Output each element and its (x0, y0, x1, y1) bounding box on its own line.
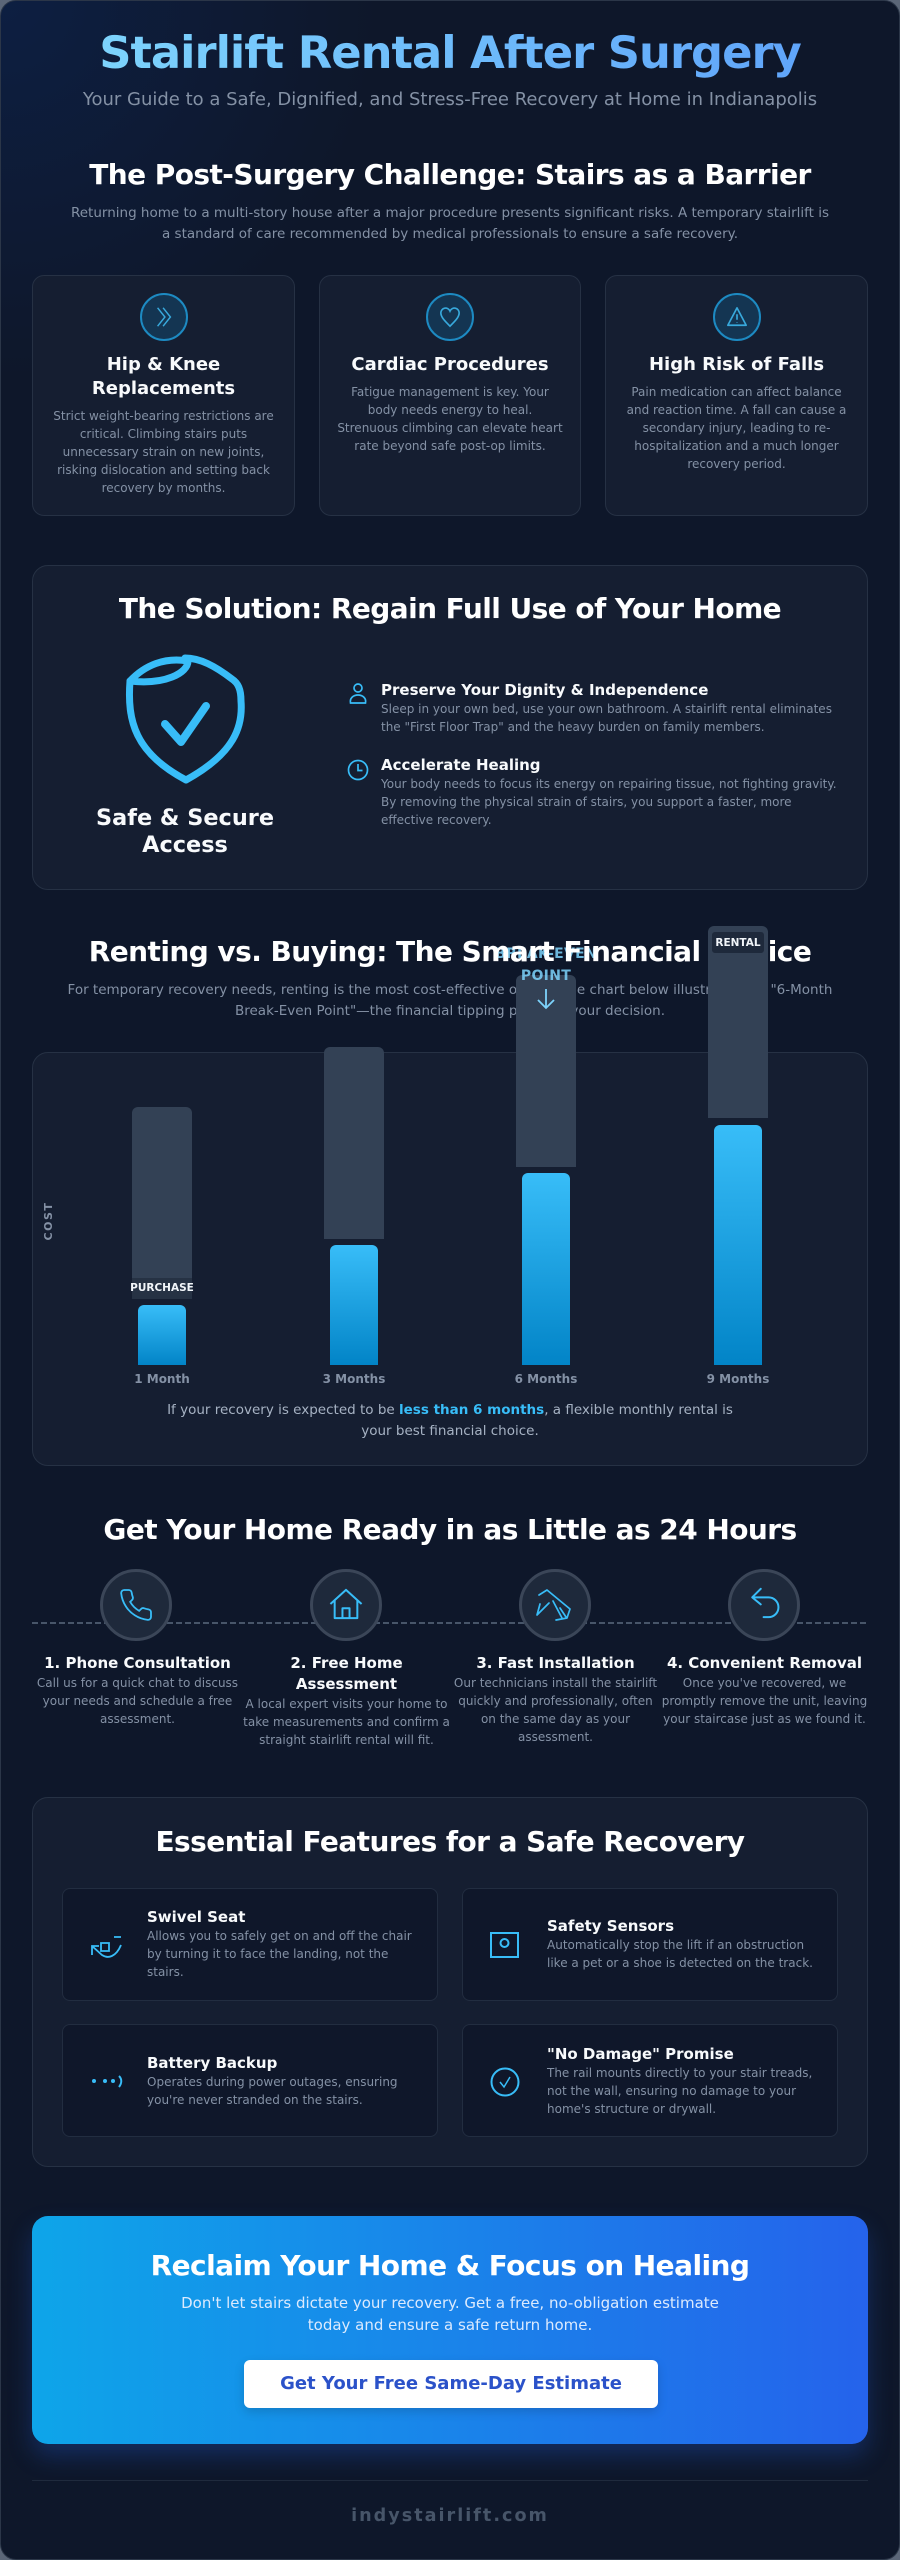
label: purchase: PURCHASE (130, 1282, 194, 1294)
panel: call to action (32, 2216, 868, 2444)
benefit text: the "First Floor Trap" and the heavy burden on family members. (381, 720, 765, 734)
step 1 text: Call us for a quick chat to discuss (37, 1676, 238, 1690)
text: 3 Months (323, 1372, 385, 1386)
step 3 text: quickly and professionally, often (458, 1694, 653, 1708)
step 1 text: your needs and schedule a free (43, 1694, 232, 1708)
bar: 3 months purchase (324, 1047, 384, 1239)
title: Stairlift Rental After Surgery (99, 26, 801, 79)
card text: rate beyond safe post-op limits. (354, 439, 546, 453)
bar: 9 months rental (714, 1125, 762, 1365)
intro text: renting vs buying (68, 982, 832, 1019)
icon: down arrow (537, 989, 555, 1010)
heading: renting vs buying: Renting vs. Buying: The Smart Financial Choice (89, 935, 811, 968)
step 4 text: your staircase just as we found it. (663, 1712, 866, 1726)
challenge intro text: a standard of care recommended by medical professionals to ensure a safe recovery. (162, 226, 738, 242)
heading: solution: The Solution: Regain Full Use of Your Home (119, 592, 781, 625)
step 2 title: 2. Free Home (290, 1654, 403, 1672)
chart takeaway: your best financial choice. (361, 1423, 539, 1439)
step 2 text (243, 1697, 450, 1747)
feature text (547, 1938, 813, 1970)
card text (627, 385, 846, 471)
cta heading: Reclaim Your Home & Focus on Healing (151, 2249, 749, 2282)
feature text (546, 2066, 812, 2116)
cta button (244, 2360, 658, 2408)
text: 6 Months (515, 1372, 577, 1386)
card text (337, 385, 563, 453)
card text: recovery period. (687, 457, 786, 471)
icon: chevrons (140, 293, 188, 341)
card text (53, 409, 274, 495)
feature text: like a pet or a shoe is detected on the track. (547, 1956, 813, 1970)
heading: challenge: The Post-Surgery Challenge: Stairs as a Barrier (89, 158, 811, 191)
feature: safety sensors (462, 1888, 838, 2001)
feature title: Battery Backup (147, 2054, 277, 2072)
label: break-even point: POINT (521, 968, 571, 984)
benefit heading: Preserve Your Dignity & Independence (381, 681, 708, 699)
benefit text (381, 702, 832, 734)
month labels: 1 Month (134, 1372, 190, 1386)
step 4 title: 4. Convenient Removal (667, 1654, 862, 1672)
card heading (92, 354, 235, 399)
card text: Pain medication can affect balance (631, 385, 842, 399)
icon: heart (426, 293, 474, 341)
shield caption (96, 805, 274, 858)
step 3 text: Our technicians install the stairlift (454, 1676, 657, 1690)
step 3 title: 3. Fast Installation (476, 1654, 635, 1672)
icon: person (350, 683, 366, 704)
bar: 1 month purchase (132, 1107, 192, 1299)
challenge intro text (71, 205, 829, 242)
shield caption: Safe & Secure (96, 805, 274, 831)
benefit text: Your body needs to focus its energy on repairing tissue, not fighting gravity. (381, 777, 837, 791)
benefit text: By removing the physical strain of stairs, you support a faster, more (381, 795, 792, 809)
label: break-even point (495, 946, 597, 984)
card text: Strict weight-bearing restrictions are (53, 409, 274, 423)
card heading: Cardiac Procedures (351, 354, 549, 375)
cta button: Get Your Free Same-Day Estimate (280, 2373, 622, 2394)
icon: sensor (490, 1932, 519, 1958)
step 1 title: 1. Phone Consultation (44, 1654, 231, 1672)
feature text: not the wall, ensuring no damage to your (547, 2084, 796, 2098)
feature text: stairs. (147, 1965, 184, 1979)
cta text: today and ensure a safe return home. (308, 2316, 592, 2334)
feature text: home's structure or drywall. (547, 2102, 716, 2116)
icon: warning (713, 293, 761, 341)
step 2 text: A local expert visits your home to (246, 1697, 448, 1711)
feature text (147, 2075, 398, 2107)
feature: no damage promise (462, 2024, 838, 2137)
footer: indystairlift.com (351, 2506, 549, 2526)
bar: 1 month rental (138, 1305, 186, 1365)
bar: 3 months rental (330, 1245, 378, 1365)
chart takeaway: If your recovery is expected to be less than 6 months, a flexible monthly rental is (167, 1402, 733, 1418)
panel: cost chart (32, 1052, 868, 1466)
feature title: Safety Sensors (547, 1917, 674, 1935)
step 1 text (37, 1676, 238, 1726)
challenge intro text: Returning home to a multi-story house after a major procedure presents significant risks. A temporary stairlift is (71, 205, 829, 221)
card text: secondary injury, leading to re- (643, 421, 830, 435)
heading: process: Get Your Home Ready in as Little as 24 Hours (103, 1513, 797, 1546)
step 1 text: assessment. (100, 1712, 175, 1726)
cta text (181, 2294, 719, 2334)
card text: risking dislocation and setting back (57, 463, 270, 477)
panel: falls (605, 275, 868, 516)
panel: hip and knee (32, 275, 295, 516)
panel: cardiac (319, 275, 581, 516)
panel: features (32, 1797, 868, 2167)
bar: 6 months purchase (516, 975, 576, 1167)
panel: solution (32, 565, 868, 890)
step 4 text: Once you've recovered, we (683, 1676, 846, 1690)
intro text: renting vs buying: Break-Even Point"—the financial tipping point for your decision. (235, 1003, 665, 1019)
shield caption: Access (142, 832, 228, 858)
card heading: Replacements (92, 378, 235, 399)
timeline line (32, 1622, 868, 1624)
card text: recovery by months. (102, 481, 225, 495)
step 2 icon: home (310, 1569, 382, 1641)
feature title: "No Damage" Promise (547, 2045, 734, 2063)
card text: and reaction time. A fall can cause a (627, 403, 846, 417)
bar: 6 months rental (522, 1173, 570, 1365)
axis label: COST (42, 1202, 55, 1240)
benefit text (381, 777, 837, 827)
label: rental: RENTAL (715, 937, 761, 949)
chart takeaway (167, 1402, 733, 1439)
bar: 9 months purchase (708, 926, 768, 1118)
benefit text: Sleep in your own bed, use your own bathroom. A stairlift rental eliminates (381, 702, 832, 716)
step 4 text: promptly remove the unit, leaving (662, 1694, 867, 1708)
icon: shield (126, 654, 245, 784)
step 4 text (662, 1676, 867, 1726)
icon: check circle (490, 2068, 520, 2096)
card text: body needs energy to heal. (368, 403, 532, 417)
step 1 icon: phone (100, 1569, 172, 1641)
heading: features: Essential Features for a Safe Recovery (155, 1825, 745, 1858)
card heading: Hip & Knee (107, 354, 220, 375)
card text: critical. Climbing stairs puts (80, 427, 247, 441)
step 4 icon: return (728, 1569, 800, 1641)
text: 9 Months (707, 1372, 769, 1386)
card text: hospitalization and a much longer (634, 439, 839, 453)
benefit heading: Accelerate Healing (381, 756, 541, 774)
feature: swivel seat (62, 1888, 438, 2001)
feature text: by turning it to face the landing, not the (147, 1947, 388, 1961)
card text: Fatigue management is key. Your (351, 385, 549, 399)
card text: Strenuous climbing can elevate heart (337, 421, 563, 435)
feature text: Operates during power outages, ensuring (147, 2075, 398, 2089)
card text: unnecessary strain on new joints, (63, 445, 264, 459)
icon: swivel (91, 1936, 122, 1958)
step 3 text (454, 1676, 657, 1744)
benefit text: effective recovery. (381, 813, 492, 827)
step 3 text: assessment. (518, 1730, 593, 1744)
feature: battery backup (62, 2024, 438, 2137)
step 3 icon: tools (519, 1569, 591, 1641)
icon: clock (348, 760, 368, 780)
step 2 title (290, 1654, 403, 1693)
feature text: Automatically stop the lift if an obstruction (547, 1938, 804, 1952)
footer divider (32, 2480, 868, 2481)
intro text: renting vs buying: For temporary recovery needs, renting is the most cost-effective option. The chart below illustrates the "6-Month (68, 982, 832, 998)
step 2 text: straight stairlift rental will fit. (259, 1733, 434, 1747)
step 3 text: on the same day as your (481, 1712, 630, 1726)
subtitle: Your Guide to a Safe, Dignified, and Stress-Free Recovery at Home in Indianapolis (83, 89, 817, 110)
step 2 title: Assessment (296, 1675, 397, 1693)
feature text: The rail mounts directly to your stair treads, (547, 2066, 812, 2080)
feature title: Swivel Seat (147, 1908, 245, 1926)
icon: battery dots (92, 2075, 122, 2088)
feature text: you're never stranded on the stairs. (147, 2093, 363, 2107)
label: break-even point: BREAK-EVEN (495, 946, 597, 962)
cta text: Don't let stairs dictate your recovery. Get a free, no-obligation estimate (181, 2294, 719, 2312)
feature text: Allows you to safely get on and off the chair (147, 1929, 412, 1943)
card heading: High Risk of Falls (649, 354, 824, 375)
feature text (147, 1929, 412, 1979)
step 2 text: take measurements and confirm a (243, 1715, 450, 1729)
